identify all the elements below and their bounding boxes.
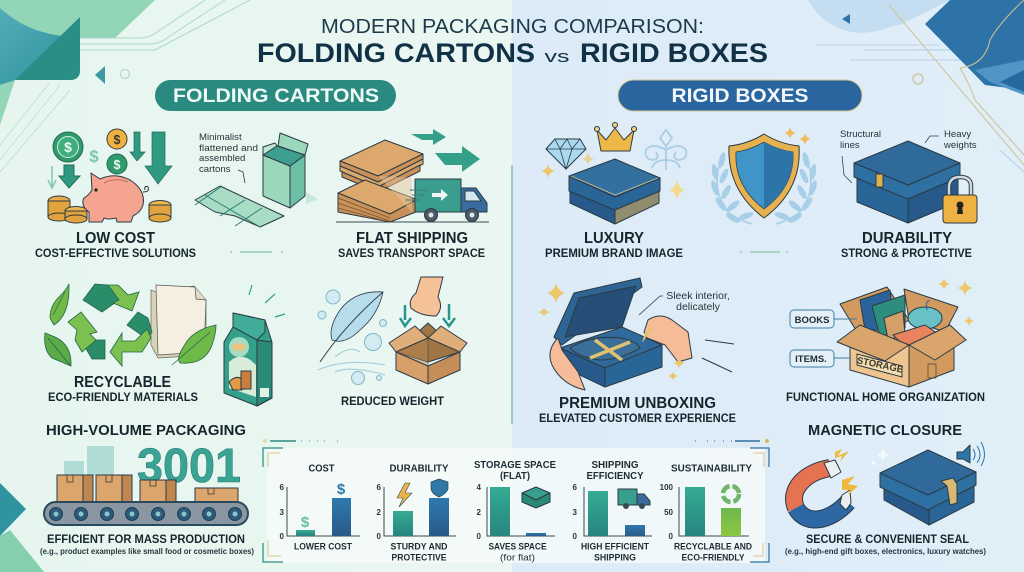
- annotation: minimalist cartons: assembled: [199, 153, 245, 164]
- icon: feather and bubbles: [318, 290, 386, 384]
- panel background: [267, 448, 765, 563]
- background: right half: [512, 0, 1024, 572]
- chart: durability: [377, 464, 456, 564]
- label: luxury: LUXURY: [584, 230, 644, 247]
- label: durability: DURABILITY: [862, 230, 952, 247]
- icon: horseshoe magnet with sparks: [794, 449, 858, 519]
- annotation: minimalist cartons: flattened and: [199, 143, 258, 154]
- chart: shipping efficiency: SHIPPING: [592, 460, 639, 471]
- annotation: minimalist cartons: [199, 132, 258, 175]
- label: low cost: LOW COST: [76, 230, 155, 247]
- icon: piggy bank with coins and arrows: $: [89, 147, 99, 166]
- icon: locked durable box: [842, 136, 977, 223]
- chart: durability: 6: [377, 483, 382, 492]
- label: secure and convenient seal: (e.g., high-end gift boxes, electronics, luxury watches): [785, 546, 986, 556]
- label: flat shipping: SAVES TRANSPORT SPACE: [338, 248, 485, 260]
- label: recyclable: ECO-FRIENDLY MATERIALS: [48, 392, 198, 404]
- chart: durability: 0: [377, 532, 382, 541]
- chart: storage space: SAVES SPACE: [488, 542, 547, 552]
- label: reduced weight: REDUCED WEIGHT: [341, 396, 444, 408]
- decoration: bottom left corner shapes: [0, 483, 44, 572]
- label: premium unboxing: PREMIUM UNBOXING: [559, 395, 716, 412]
- label: functional home organization: FUNCTIONAL HOME ORGANIZATION: [786, 390, 985, 404]
- icon: conveyor belt with boxes: [44, 446, 248, 525]
- annotation: structural lines: Structural: [840, 129, 881, 140]
- annotation: heavy weights: [943, 129, 977, 151]
- icon: recycling arrows, leaves and paper: [45, 284, 216, 366]
- heading pill: folding cartons: FOLDING CARTONS: [173, 85, 379, 107]
- icon: storage box with books and clothes: [837, 278, 974, 387]
- chart: sustainability: 0: [669, 532, 674, 541]
- tag: books: [790, 310, 857, 328]
- chart: cost: $: [301, 514, 310, 531]
- chart: storage space: [474, 460, 556, 564]
- panel corner brackets: [263, 439, 769, 562]
- annotation: structural lines: lines: [840, 140, 860, 151]
- chart: sustainability: 100: [660, 483, 674, 492]
- icon: luxury box with diamond and crown: [541, 122, 686, 224]
- decoration: top left corner shapes: [0, 0, 250, 172]
- icon: flattened and assembled cartons: [195, 133, 318, 227]
- chart: sustainability: [660, 464, 752, 564]
- chart: shipping efficiency: 6: [573, 483, 578, 492]
- label: luxury: PREMIUM BRAND IMAGE: [545, 248, 683, 260]
- icon: magnetic closure box with sound: [871, 442, 984, 525]
- chart: shipping efficiency: EFFICIENCY: [586, 471, 644, 482]
- tag: items: ITEMS.: [795, 354, 827, 365]
- title: vs: [544, 47, 570, 66]
- tag: books: BOOKS: [795, 315, 829, 326]
- chart: storage space: 4: [477, 483, 482, 492]
- chart: cost: [280, 464, 360, 552]
- chart: durability: PROTECTIVE: [392, 552, 447, 564]
- heading pill: folding cartons: [155, 80, 396, 111]
- chart: storage space: 0: [477, 532, 482, 541]
- icon: piggy bank with coins and arrows: $: [114, 133, 121, 147]
- annotation: heavy weights: weights: [943, 140, 977, 151]
- chart: cost: COST: [308, 464, 334, 474]
- annotation: structural lines: [840, 129, 881, 151]
- heading pill: rigid boxes: [618, 80, 862, 111]
- title: MODERN PACKAGING COMPARISON:: [321, 16, 704, 38]
- chart: cost: $: [337, 481, 346, 498]
- chart: durability: DURABILITY: [390, 464, 449, 474]
- chart: sustainability: ECO-FRIENDLY: [682, 552, 745, 564]
- label: recyclable: RECYCLABLE: [74, 374, 171, 391]
- heading pill: rigid boxes: RIGID BOXES: [672, 85, 808, 107]
- icon: piggy bank with coins and arrows: [48, 129, 172, 223]
- chart: storage space: (for flat): [500, 552, 535, 564]
- icon: storage box with books and clothes: STORAGE: [856, 355, 904, 376]
- chart: sustainability: SUSTAINABILITY: [671, 464, 752, 474]
- icon: flat shipping stack with truck: [336, 129, 489, 222]
- chart: sustainability: 50: [664, 508, 674, 517]
- label: low cost: COST-EFFECTIVE SOLUTIONS: [35, 248, 196, 260]
- chart: shipping efficiency: SHIPPING: [594, 552, 636, 564]
- icon: shield with laurels: [709, 127, 819, 225]
- icon: green food bag: [224, 285, 285, 406]
- label: durability: STRONG & PROTECTIVE: [841, 248, 972, 260]
- chart: durability: 2: [377, 508, 382, 517]
- label: premium unboxing: [539, 395, 736, 425]
- chart: cost: LOWER COST: [294, 542, 352, 552]
- label: flat shipping: FLAT SHIPPING: [356, 230, 468, 247]
- icon: piggy bank with coins and arrows: $: [64, 139, 72, 155]
- label: secure and convenient seal: SECURE & CONVENIENT SEAL: [806, 534, 969, 546]
- icon: piggy bank with coins and arrows: $: [114, 158, 121, 172]
- label: efficient for mass production: EFFICIENT FOR MASS PRODUCTION: [47, 534, 245, 546]
- title: RIGID BOXES: [580, 38, 768, 68]
- title: FOLDING CARTONS: [257, 38, 535, 68]
- label: low cost: [35, 230, 196, 260]
- label: recyclable: [48, 374, 198, 404]
- chart: shipping efficiency: HIGH EFFICIENT: [581, 542, 649, 552]
- chart: shipping efficiency: 0: [573, 532, 578, 541]
- label: premium unboxing: ELEVATED CUSTOMER EXPERIENCE: [539, 413, 736, 425]
- label: luxury: [545, 230, 683, 260]
- label: durability: [841, 230, 972, 260]
- background: left half: [0, 0, 512, 572]
- chart: storage space: STORAGE SPACE: [474, 460, 556, 471]
- chart: storage space: 2: [477, 508, 482, 517]
- heading: magnetic closure: MAGNETIC CLOSURE: [808, 423, 962, 439]
- title: [257, 16, 768, 68]
- panel: comparison charts: [263, 439, 769, 564]
- icon: hand dropping light box: [389, 277, 467, 384]
- icon: premium unboxing open box with hands: [538, 278, 734, 390]
- label: efficient for mass production: [40, 534, 254, 556]
- chart: cost: 6: [280, 483, 285, 492]
- chart: shipping efficiency: 3: [573, 508, 578, 517]
- annotation: sleek interior: [666, 290, 730, 313]
- chart: cost: 3: [280, 508, 285, 517]
- chart: storage space: (FLAT): [500, 471, 530, 482]
- annotation: minimalist cartons: Minimalist: [199, 132, 242, 143]
- chart: durability: STURDY AND: [390, 542, 448, 552]
- annotation: heavy weights: Heavy: [944, 129, 971, 140]
- heading: high-volume packaging: HIGH-VOLUME PACKAGING: [46, 423, 246, 439]
- label: efficient for mass production: (e.g., product examples like small food or cosmetic boxes): [40, 546, 254, 556]
- label: flat shipping: [338, 230, 485, 260]
- annotation: sleek interior: delicately: [676, 301, 721, 313]
- tag: items: [790, 350, 851, 367]
- chart: cost: 0: [280, 532, 285, 541]
- chart: shipping efficiency: [573, 460, 652, 564]
- decoration: top right corner shapes: [808, 0, 1024, 172]
- annotation: minimalist cartons: cartons: [199, 164, 231, 175]
- number: 3001: 3001: [137, 440, 241, 493]
- chart: sustainability: RECYCLABLE AND: [674, 542, 752, 552]
- annotation: sleek interior: Sleek interior,: [666, 290, 730, 302]
- label: secure and convenient seal: [785, 534, 986, 556]
